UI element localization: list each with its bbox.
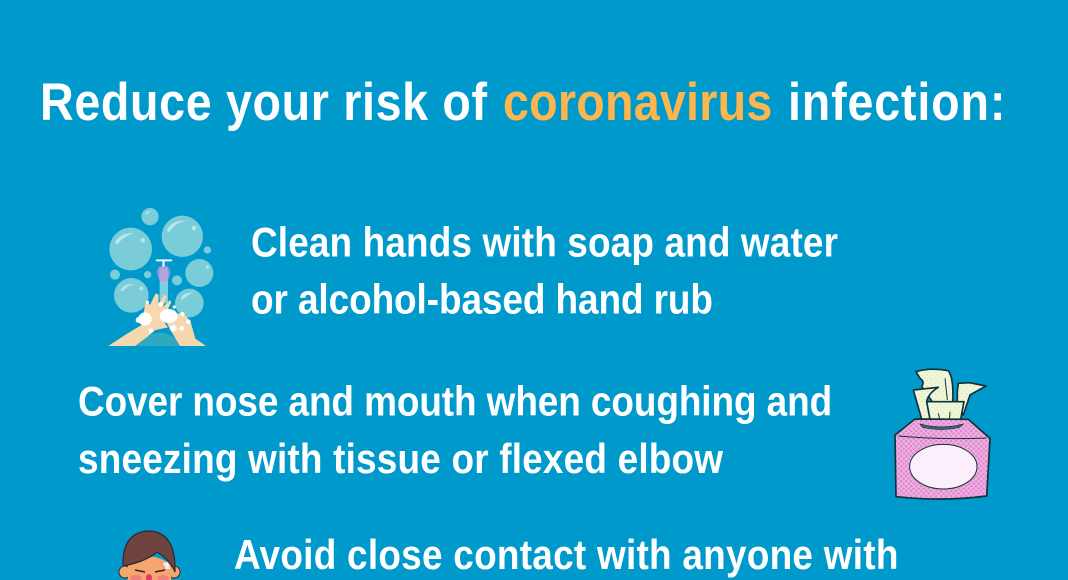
- title: coronavirus: [503, 72, 772, 132]
- tissues: [913, 369, 986, 429]
- text: cover nose and mouth: sneezing with tissue or flexed elbow: [78, 436, 723, 483]
- title: Reduce your risk of: [40, 72, 487, 132]
- box edge: [898, 436, 987, 439]
- icon: handwashing with soap bubbles: [108, 208, 213, 346]
- text: avoid close contact: Avoid close contact with anyone with: [234, 532, 898, 579]
- face: [128, 556, 171, 580]
- soap bubbles: [109, 208, 213, 317]
- icon: tissue box: [895, 369, 990, 499]
- ears: [119, 566, 131, 578]
- text: cover nose and mouth: [78, 378, 832, 483]
- eyes: [135, 570, 165, 572]
- sweat: [163, 562, 170, 569]
- box: [895, 419, 990, 499]
- water basin: [135, 333, 182, 346]
- faucet: [156, 259, 172, 303]
- bubble highlights: [115, 211, 209, 300]
- soap foam: [136, 301, 191, 333]
- icon: sick person: [119, 531, 180, 580]
- text: clean hands: [251, 219, 838, 323]
- text: clean hands: Clean hands with soap and water: [251, 219, 838, 266]
- washing hands: [108, 293, 206, 346]
- oval window: [910, 444, 977, 489]
- text: cover nose and mouth: Cover nose and mouth when coughing and: [78, 378, 832, 425]
- box opening: [920, 424, 963, 429]
- text: clean hands: or alcohol-based hand rub: [251, 276, 713, 323]
- title: infection:: [788, 72, 1005, 132]
- title: [40, 72, 1005, 132]
- hair: [123, 531, 175, 572]
- cheeks and nose: [130, 575, 142, 580]
